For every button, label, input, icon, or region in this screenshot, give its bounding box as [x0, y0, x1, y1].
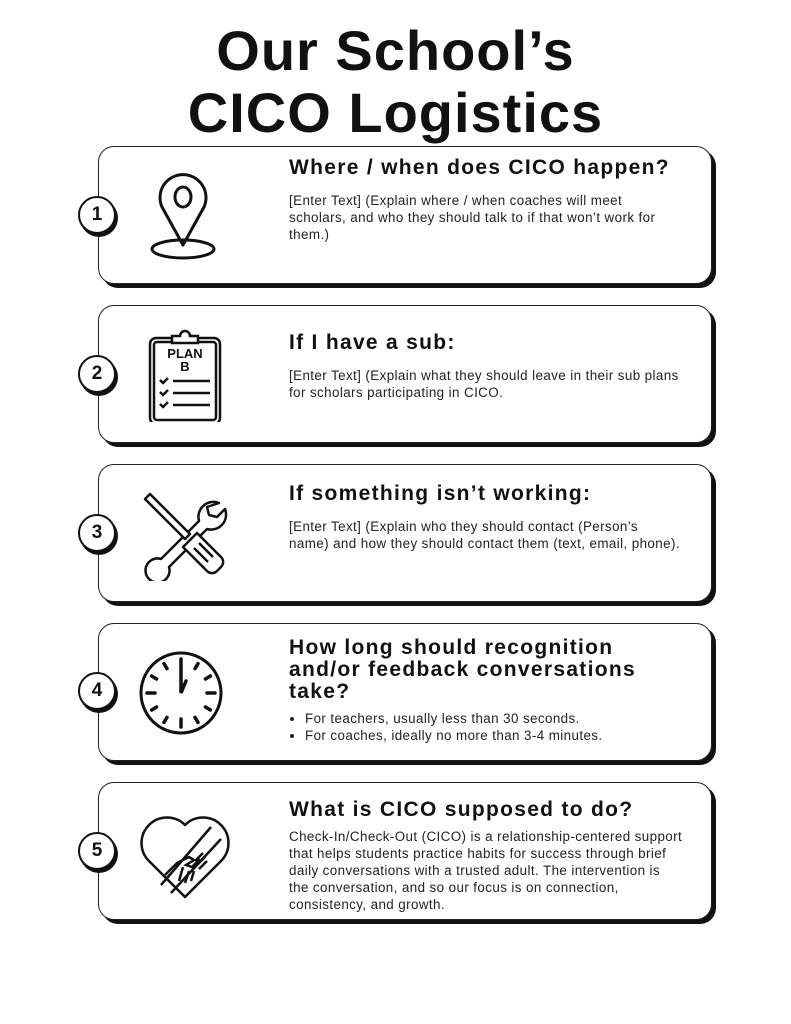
icon: location pin — [150, 173, 216, 260]
number 3: 3 — [92, 522, 102, 543]
number 4 — [78, 672, 116, 710]
number 2: 2 — [92, 363, 102, 384]
icon: clipboard plan B — [148, 330, 222, 422]
text: For teachers, usually less than 30 seconds. — [305, 711, 580, 726]
heading: Where / when does CICO happen? — [289, 156, 670, 179]
icon: tools — [144, 492, 228, 581]
title: CICO Logistics — [188, 81, 603, 144]
text: them.) — [289, 227, 329, 242]
panel: how long — [98, 623, 712, 761]
panel: sub — [98, 305, 712, 443]
number 2 — [78, 355, 116, 393]
text: [Enter Text] (Explain who they should contact (Person’s — [289, 519, 638, 534]
number 4: 4 — [92, 680, 102, 701]
panel: where / when — [98, 146, 712, 284]
panel: what is CICO — [98, 782, 712, 920]
number 3 — [78, 514, 116, 552]
text: scholars, and who they should talk to if that won’t work for — [289, 210, 655, 225]
title: Our School’s — [216, 19, 575, 82]
text: daily conversations with a trusted adult. The intervention is — [289, 863, 660, 878]
text: [Enter Text] (Explain what they should leave in their sub plans — [289, 368, 679, 383]
text — [290, 711, 603, 743]
text: the conversation, and so our focus is on connection, — [289, 880, 619, 895]
number 1: 1 — [92, 204, 102, 225]
heading: How long should recognition — [289, 636, 613, 659]
heading — [289, 636, 636, 703]
text: [Enter Text] (Explain where / when coaches will meet — [289, 193, 622, 208]
heading: If I have a sub: — [289, 331, 456, 354]
heading: and/or feedback conversations — [289, 658, 636, 681]
text — [289, 829, 682, 912]
text: name) and how they should contact them (text, email, phone). — [289, 536, 680, 551]
text — [289, 193, 655, 242]
title — [188, 19, 603, 144]
heading: If something isn’t working: — [289, 482, 591, 505]
icon: clock — [140, 652, 222, 734]
number 1 — [78, 196, 116, 234]
text — [289, 368, 679, 400]
number 5: 5 — [92, 840, 102, 861]
text: consistency, and growth. — [289, 897, 445, 912]
heading: What is CICO supposed to do? — [289, 798, 633, 821]
text: that helps students practice habits for success through brief — [289, 846, 666, 861]
text: Check-In/Check-Out (CICO) is a relationship-centered support — [289, 829, 682, 844]
text — [289, 519, 680, 551]
number 5 — [78, 832, 116, 870]
icon: clipboard plan B: PLAN — [167, 346, 203, 361]
panel: not working — [98, 464, 712, 602]
icon: heart with hands — [140, 816, 230, 898]
text: For coaches, ideally no more than 3-4 minutes. — [305, 728, 603, 743]
heading: take? — [289, 680, 350, 703]
text: for scholars participating in CICO. — [289, 385, 503, 400]
icon: clipboard plan B: B — [180, 359, 190, 374]
